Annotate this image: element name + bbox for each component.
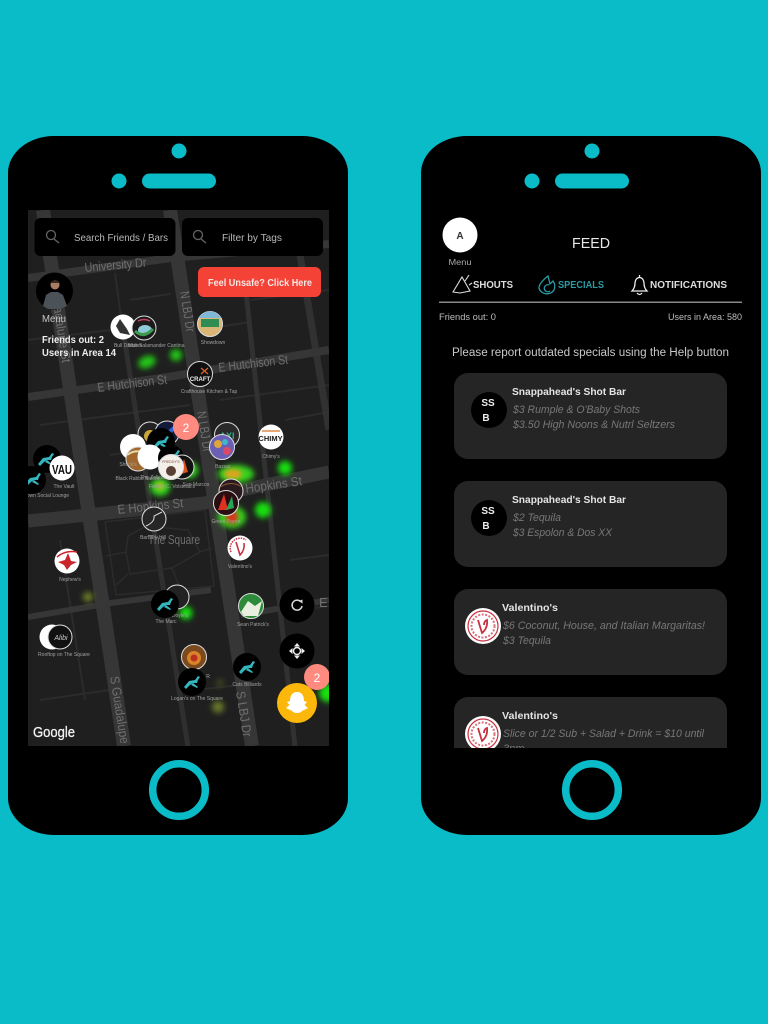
marker: Nephew's: Nephew's [59,577,81,583]
marker: cluster at the square: Shuck's [119,462,137,468]
stats: friends and users: Users in Area 14 [42,348,116,359]
marker: Rooftop: Alibi [53,635,68,642]
camera dot [584,144,600,158]
street labels: Hopkins St [244,473,303,496]
street labels: N LBJ Dr [177,290,198,333]
card: Valentino's margaritas: $6 Coconut, House, and Italian Margaritas! [502,620,705,632]
card: Snappahead's Shot Bar one: $3.50 High Noons & Nutrl Seltzers [512,419,675,431]
marker: cluster at the square: The Zelicks [140,475,166,481]
marker: Crafthouse [181,362,238,395]
heading: feed: FEED [572,235,610,252]
marker: dark bar [219,479,243,503]
camera dot [172,144,186,158]
heat map [83,349,337,713]
button: feel unsafe [198,267,321,297]
marker: Green Parrot: Green Parrot [212,519,241,525]
stat: friends out: Friends out: 0 [439,312,496,323]
marker: Bazaar: Bazaar [215,464,231,470]
tab: notifications [632,275,727,294]
tab: shouts: SHOUTS [473,279,513,291]
marker: Salamander Cantina: Blue Salamander Cantina [128,343,185,349]
marker: Taxi [214,422,240,448]
search box: filter by tags: Filter by Tags [222,232,282,244]
marker: Cats Billiards: Cats Billiards [232,682,262,688]
marker: Showdown [198,311,225,346]
divider [439,302,742,303]
card: Snappahead's Shot Bar two: B [482,521,490,532]
street labels [48,255,328,745]
menu avatar: Menu [448,257,472,267]
street labels: E [319,595,328,610]
marker: Sean Patrick's [237,594,269,628]
button: snapchat [277,683,317,723]
street labels: S Guadalupe [107,675,132,745]
card: Snappahead's Shot Bar one: $3 Rumple & O'Baby Shots [512,404,640,416]
speaker pill [142,174,216,188]
marker: Logan's on The Square [171,668,223,702]
tab: specials [539,276,604,294]
marker: Rooftop: Rooftop on The Square [38,652,90,658]
panel: left phone map screen [8,136,348,835]
card: Snappahead's Shot Bar one: Snappahead's Shot Bar [512,386,626,398]
card: Snappahead's Shot Bar one: B [482,413,490,424]
notice text: Please report outdated specials using the Help button [452,347,729,359]
panel: right phone feed screen [421,136,761,835]
button: recenter [280,634,314,668]
phone body [421,136,761,835]
marker: Bazaar [210,434,234,470]
marker: Chimy's [258,424,284,460]
marker: cluster at the square [115,414,210,490]
marker: Crafthouse: CRAFT [190,377,210,383]
button: refresh [280,588,314,622]
tab: specials: SPECIALS [558,279,604,291]
snapchat count badge: 2 [314,671,321,685]
marker: Valentino's: Valentino's [228,564,252,570]
street labels: The Square [148,532,200,547]
menu avatar [442,218,478,267]
street labels: E Hutchison St [97,372,168,395]
card: Snappahead's Shot Bar two: $3 Espolon & Dos XX [512,527,613,539]
marker: The Vault: VAU [52,462,72,477]
card: Valentino's margaritas [454,589,727,675]
marker: Logan's on The Square: Logan's on The Square [171,696,223,702]
marker: The Marc: The Marc [155,619,177,625]
stats: friends and users [42,335,116,359]
marker: Crafthouse: Crafthouse Kitchen & Tap [181,389,238,395]
marker: cluster at the square: Black Rabbit Saloon [115,476,161,482]
marker: Chimy's: CHIMY [258,434,283,443]
home button ring [153,764,205,816]
street labels: N LBJ Dr [194,410,215,453]
card: Snappahead's Shot Bar two: SS [481,506,495,517]
card: Valentino's slice deal [454,697,727,748]
search box: filter by tags [182,218,323,256]
menu avatar: A [456,231,464,242]
home button ring [566,764,618,816]
marker: Rooftop [38,624,90,658]
street labels: E Hutchison St [218,352,289,375]
tab: shouts [453,275,513,293]
stat: users in area: Users in Area: 580 [668,312,742,323]
street labels: E Hopkins St [117,495,184,517]
street labels: Guadalupe St [48,290,74,364]
marker: Social Lounge: Uptown Social Lounge [19,493,69,499]
tab: notifications: NOTIFICATIONS [650,279,727,291]
button: feel unsafe: Feel Unsafe? Click Here [208,277,312,289]
card: Valentino's margaritas: Valentino's [502,602,558,614]
search box: friends and bars: Search Friends / Bars [74,232,168,244]
marker: pizza place: R [206,674,210,680]
marker: The Vault: The Vault [53,484,75,490]
marker: cluster at the square: FREDDY'S [162,460,180,464]
card: Valentino's slice deal: Slice or 1/2 Sub + Salad + Drink = $10 until [503,728,705,740]
phone body [8,136,348,835]
feed cards [454,373,727,783]
speaker pill [555,174,629,188]
marker: Green Parrot [212,490,241,525]
marker: Chimy's: Chimy's [262,454,280,460]
front sensor dot [112,174,126,188]
card: Valentino's margaritas: $3 Tequila [502,635,551,647]
avatar menu: Menu [42,314,66,325]
card: Valentino's slice deal: Valentino's [502,710,558,722]
card: Valentino's slice deal: 3pm [503,743,524,755]
Google logo: Google [33,724,75,741]
street labels: University Dr [84,255,148,275]
marker: Cats Billiards [232,653,262,688]
marker: cluster at the square: Freddy C. Volstead's [149,484,195,490]
marker: Sean Patrick's: Sean Patrick's [237,622,269,628]
count badge: 2 [183,421,190,435]
marker: Nephew's [54,548,81,583]
card: Snappahead's Shot Bar one [454,373,727,459]
marker: pizza place [182,644,210,680]
card: Snappahead's Shot Bar one: SS [481,398,495,409]
marker: cluster at the square: San Marcos [183,482,210,488]
card: Snappahead's Shot Bar two: $2 Tequila [512,512,561,524]
marker: Bull Daddies: Bull Daddies [114,343,143,349]
stats: friends and users: Friends out: 2 [42,335,104,346]
marker: Bull Daddies [110,314,143,349]
marker: Salamander Cantina [128,316,185,349]
marker: Social Lounge [28,445,69,498]
marker: The Marc: Doyle's [172,613,189,619]
markers [18,311,284,702]
marker: Taxi: AXI [219,431,235,441]
marker: The Vault [50,456,75,490]
map [18,210,337,747]
avatar menu [36,272,73,325]
marker: Showdown: Showdown [201,340,225,346]
marker: The Marc [151,585,189,625]
marker: Valentino's [228,536,252,570]
marker: Barbary Hill [140,507,166,541]
search box: friends and bars [34,218,176,256]
card: Snappahead's Shot Bar two: Snappahead's Shot Bar [512,494,626,506]
card: Snappahead's Shot Bar two [454,481,727,567]
snapchat count badge [304,664,329,690]
front sensor dot [524,174,540,188]
street labels: S LBJ Dr [233,690,255,738]
marker: Barbary Hill: Barbary Hill [140,535,166,541]
